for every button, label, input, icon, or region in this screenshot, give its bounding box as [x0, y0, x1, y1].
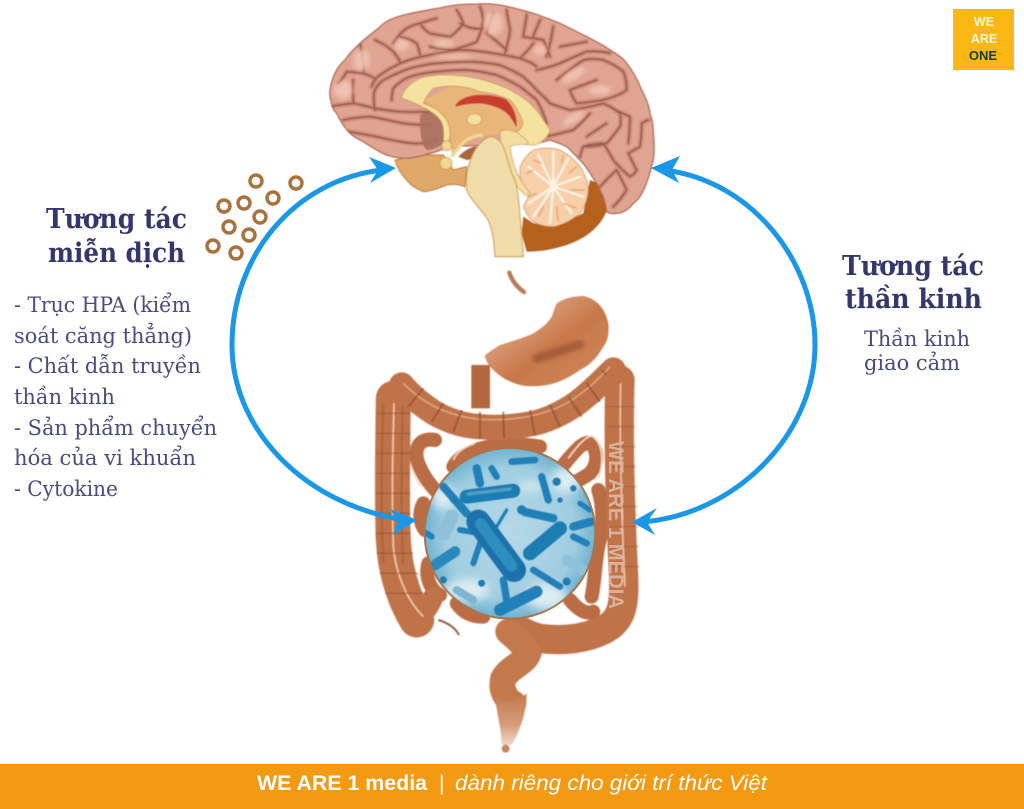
- ascending colon: [375, 398, 433, 620]
- heading: immune interaction: [46, 204, 187, 269]
- illustration: brain: [330, 4, 654, 257]
- transverse colon: [402, 367, 617, 438]
- footer bar: [0, 764, 1024, 809]
- brain: cortex: [330, 4, 654, 214]
- heading: neural interaction: Tương tác: [842, 251, 984, 282]
- logo: WE ARE ONE: ONE: [969, 48, 997, 63]
- text block: immune list: - Sản phẩm chuyển: [14, 416, 217, 440]
- brain: tectum band: [500, 130, 537, 197]
- brain: gyri folds: [330, 7, 648, 207]
- logo: WE ARE ONE: ARE: [971, 32, 997, 46]
- duodenum: [453, 365, 509, 408]
- stomach shadow: [533, 343, 583, 360]
- brain: corpus callosum: [402, 75, 550, 145]
- text block: sympathetic nerve: giao cảm: [864, 351, 960, 375]
- brain: brainstem: [466, 137, 523, 257]
- heading: neural interaction: thần kinh: [845, 283, 982, 315]
- logo: WE ARE ONE: [953, 9, 1014, 70]
- brain: red band: [455, 95, 517, 127]
- descending colon: [517, 380, 640, 640]
- text block: immune list: - Trục HPA (kiểm: [14, 293, 191, 317]
- appendix: [438, 620, 459, 635]
- arrowhead: to gut, left: [390, 509, 417, 535]
- bacteria circle: [425, 448, 595, 619]
- text block: immune list: - Cytokine: [14, 477, 118, 501]
- footer bar: dành riêng cho giới trí thức Việt: [455, 772, 768, 795]
- logo: WE ARE ONE: WE: [974, 15, 994, 29]
- text block: immune list: hóa của vi khuẩn: [14, 446, 196, 470]
- brain: stalk and pituitary: [440, 135, 485, 169]
- watermark: WE ARE 1 MEDIA: [604, 441, 627, 609]
- footer bar: |: [439, 772, 444, 795]
- small intestine loops: [416, 439, 602, 617]
- brain: inner frontal tip: [420, 112, 447, 150]
- text block: sympathetic nerve: [864, 327, 970, 375]
- immune particles: [207, 175, 302, 259]
- heading: immune interaction: Tương tác: [46, 204, 187, 235]
- pale rods: [443, 517, 452, 533]
- anus: [502, 745, 510, 753]
- brain: lower cerebellum: [522, 180, 609, 252]
- brain: gyri highlights: [334, 12, 612, 128]
- text block: immune list: - Chất dẫn truyền: [14, 354, 201, 378]
- large central rod: [478, 522, 514, 570]
- arrow: left arc, gut to brain: [232, 157, 417, 535]
- medium rods: [435, 552, 455, 565]
- sigmoid: [502, 632, 528, 703]
- arrow: right arc, brain to gut: [632, 156, 815, 535]
- text block: sympathetic nerve: Thần kinh: [864, 327, 970, 351]
- footer bar: WE ARE 1 media: [257, 772, 427, 795]
- esophagus: [509, 273, 524, 292]
- stomach: [485, 296, 609, 386]
- heading: immune interaction: miễn dịch: [48, 236, 185, 269]
- pale patches: [431, 467, 582, 610]
- heading: neural interaction: [842, 251, 984, 315]
- brain: nucleus: [467, 114, 482, 125]
- illustration: digestive tract: [375, 273, 640, 753]
- text block: immune list: soát căng thẳng): [14, 323, 192, 348]
- cocci: [440, 477, 577, 587]
- text block: immune list: [14, 293, 217, 501]
- arrowhead: to brain, right: [651, 156, 680, 183]
- arrowhead: to brain, left: [369, 157, 396, 183]
- small rods: [427, 460, 592, 600]
- text block: immune list: thần kinh: [14, 385, 115, 409]
- brain: lower forebrain: [395, 155, 467, 192]
- rectum: [495, 693, 527, 745]
- arrowhead: to gut, right: [632, 508, 657, 535]
- intestine highlight edges: [408, 436, 602, 487]
- brain: cerebellum: [520, 148, 588, 227]
- brain: thalamus region: [423, 85, 527, 153]
